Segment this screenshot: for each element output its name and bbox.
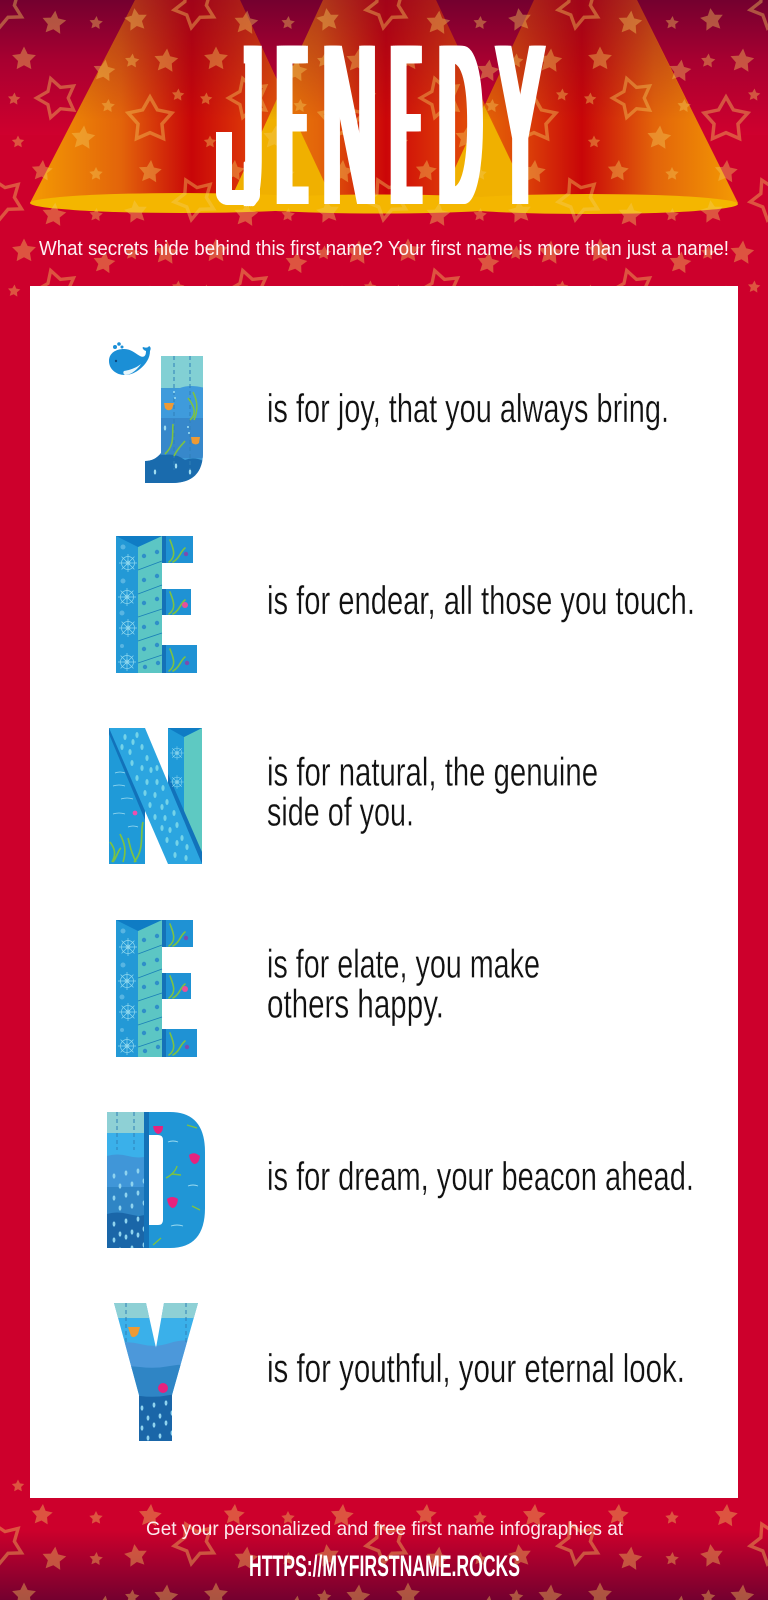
- title: D: [440, 0, 480, 253]
- icon: letter J: [145, 356, 203, 483]
- text: N line: side of you.: [267, 790, 414, 834]
- text: E line: others happy.: [267, 982, 444, 1026]
- title: E: [394, 0, 418, 253]
- footer url: HTTPS://MYFIRSTNAME.ROCKS: [249, 1550, 520, 1583]
- row 2: letter E and text: [116, 536, 695, 673]
- row 4: second letter E and text: [116, 920, 551, 1057]
- icon: letter E: [116, 536, 197, 673]
- icon: letter N: [109, 728, 202, 864]
- row 5: letter D and text: [107, 1112, 694, 1253]
- icon: letter D: [107, 1112, 205, 1253]
- row 1: letter J and text: [109, 342, 669, 486]
- subtitle: What secrets hide behind this first name? Your first name is more than just a name!: [39, 238, 729, 260]
- title: J: [236, 0, 259, 253]
- footer line: Get your personalized and free first name infographics at: [146, 1518, 624, 1540]
- title: Y: [498, 0, 542, 253]
- icon: whale: [109, 342, 151, 375]
- icon: letter Y: [110, 1303, 202, 1443]
- spotlight cones: [30, 0, 738, 214]
- row 6: letter Y and text: [110, 1303, 685, 1443]
- text: E line: is for elate, you make: [267, 942, 540, 986]
- panel: white content card: [30, 286, 738, 1498]
- icon: letter E: [116, 920, 197, 1057]
- row 3: letter N and text: [109, 728, 609, 864]
- title: E: [280, 0, 304, 253]
- title: [216, 0, 546, 253]
- text: N line: is for natural, the genuine: [267, 750, 598, 794]
- title: N: [323, 0, 376, 253]
